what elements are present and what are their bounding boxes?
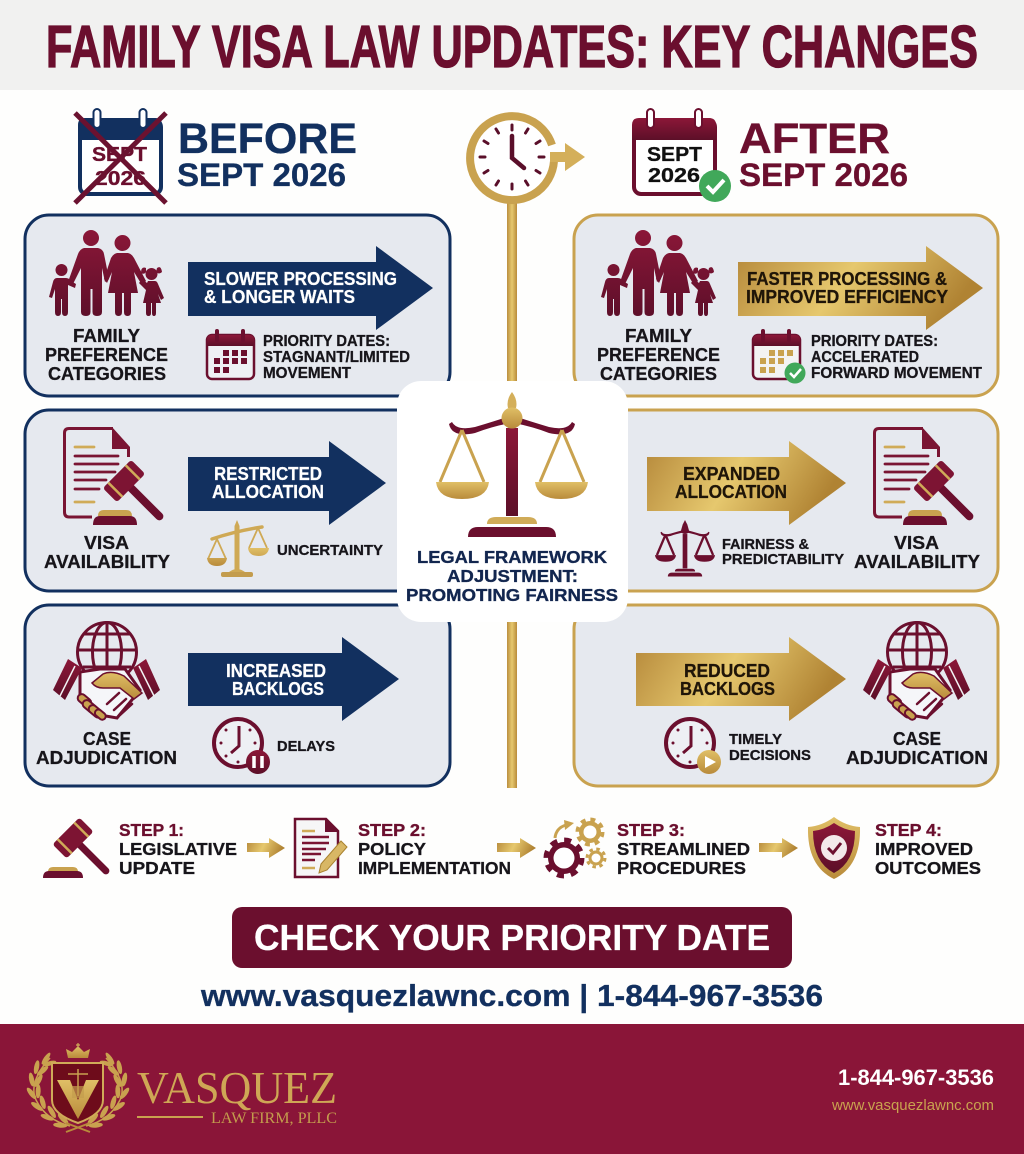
call to action button (232, 907, 792, 968)
text: legal framework caption: PROMOTING FAIRNESS (406, 585, 618, 605)
step 2: IMPLEMENTATION (358, 858, 511, 878)
arrow: slower processing: & LONGER WAITS (204, 287, 355, 307)
arrow: step 1 to 2 (247, 838, 285, 858)
panel: after, case adjudication (574, 605, 998, 786)
logo: crest (25, 1043, 131, 1133)
step 3 (546, 820, 750, 878)
arrow: faster processing: FASTER PROCESSING & (747, 269, 947, 289)
arrow: increased backlogs: INCREASED (226, 661, 326, 681)
label: family preference categories (597, 325, 720, 384)
icon: small tilted gold scales (207, 520, 269, 577)
footer contact: www.vasquezlawnc.com (831, 1097, 994, 1114)
arrow: increased backlogs (188, 637, 399, 721)
step 3: STEP 3: (617, 820, 685, 840)
text: priority dates (263, 333, 410, 382)
call to action button: CHECK YOUR PRIORITY DATE (254, 917, 770, 958)
logo: wordmark: VASQUEZ (137, 1062, 337, 1113)
panel: before, visa availability (25, 410, 450, 591)
step 2: STEP 2: (358, 820, 426, 840)
panel: before, case adjudication (25, 605, 450, 786)
center panel: legal framework adjustment (397, 381, 628, 622)
icon: calendar with check (753, 331, 806, 384)
icon: crossed-out calendar (75, 109, 166, 203)
icon: crossed-out calendar: 2026 (95, 167, 146, 190)
arrow: reduced backlogs (636, 637, 846, 721)
label: family preference categories: PREFERENCE (45, 344, 168, 365)
step 1: STEP 1: (119, 820, 184, 840)
arrow: slower processing (188, 246, 433, 330)
icon: checked calendar: SEPT (647, 143, 702, 166)
text: legal framework caption (406, 547, 618, 605)
label: family preference categories: FAMILY (73, 325, 141, 346)
icon: large scales of justice (436, 392, 588, 537)
step 3: STREAMLINED (617, 839, 750, 859)
arrow: expanded allocation (647, 441, 846, 525)
arrow: step 3 to 4 (759, 838, 798, 858)
before heading: BEFORE (178, 115, 357, 163)
text: fairness and predictability: FAIRNESS & (722, 536, 809, 553)
label: case adjudication (36, 728, 177, 768)
panel: after, visa availability (574, 410, 998, 591)
icon: document and gavel (64, 427, 176, 533)
icon: family (601, 230, 716, 316)
label: family preference categories: CATEGORIES (600, 363, 717, 384)
icon: gears (546, 820, 605, 876)
footer contact (831, 1065, 994, 1114)
text: uncertainty: UNCERTAINTY (277, 542, 383, 559)
label: visa availability (854, 532, 981, 572)
after heading: SEPT 2026 (739, 157, 908, 193)
text: priority dates: PRIORITY DATES: (263, 333, 390, 350)
footer contact: 1-844-967-3536 (838, 1065, 994, 1090)
icon: gavel (43, 817, 122, 887)
step 3: PROCEDURES (617, 858, 746, 878)
step 1: UPDATE (119, 858, 195, 878)
icon: clock with play (666, 719, 721, 774)
step 4: IMPROVED (875, 839, 973, 859)
icon: checked calendar: 2026 (648, 164, 700, 187)
step 4: OUTCOMES (875, 858, 981, 878)
label: family preference categories (45, 325, 168, 384)
text: timely decisions: TIMELY (729, 731, 782, 748)
panel: after, family preference categories (574, 215, 998, 396)
logo: wordmark: LAW FIRM, PLLC (211, 1110, 337, 1127)
label: case adjudication: CASE (893, 728, 941, 749)
arrow: slower processing: SLOWER PROCESSING (204, 269, 397, 289)
label: family preference categories: FAMILY (625, 325, 693, 346)
icon: globe and handshake (863, 622, 970, 721)
text: fairness and predictability: PREDICTABILITY (722, 551, 844, 568)
label: case adjudication: CASE (83, 728, 131, 749)
text: legal framework caption: ADJUSTMENT: (447, 566, 578, 586)
label: visa availability: VISA (894, 532, 939, 553)
contact line: www.vasquezlawnc.com | 1-844-967-3536 (200, 978, 823, 1013)
arrow: faster processing: IMPROVED EFFICIENCY (746, 287, 948, 307)
step 4 (808, 817, 981, 879)
icon: document with pen (295, 818, 347, 877)
arrow: increased backlogs: BACKLOGS (232, 679, 324, 699)
icon: small burgundy scales (655, 520, 715, 577)
arrow: step 2 to 3 (497, 838, 536, 858)
label: family preference categories: CATEGORIES (48, 363, 166, 384)
arrow: restricted allocation (188, 441, 386, 525)
icon: checked calendar (632, 109, 731, 202)
arrow: faster processing (738, 246, 983, 330)
before heading: SEPT 2026 (177, 157, 346, 193)
central gold timeline pole (507, 198, 517, 788)
label: case adjudication: ADJUDICATION (36, 747, 177, 768)
icon: document and gavel (874, 427, 986, 533)
step 4: STEP 4: (875, 820, 942, 840)
icon: crossed-out calendar: SEPT (92, 143, 147, 166)
icon: shield with check (808, 817, 860, 879)
arrow: restricted allocation: RESTRICTED (214, 464, 322, 484)
text: priority dates: PRIORITY DATES: (811, 333, 938, 350)
text: priority dates (811, 333, 983, 382)
text: priority dates: FORWARD MOVEMENT (811, 365, 983, 382)
text: fairness and predictability (722, 536, 844, 568)
text: delays: DELAYS (277, 738, 335, 755)
label: case adjudication: ADJUDICATION (846, 747, 988, 768)
step 2 (295, 818, 511, 878)
label: case adjudication (846, 728, 988, 768)
text: priority dates: MOVEMENT (263, 365, 352, 382)
label: family preference categories: PREFERENCE (597, 344, 720, 365)
label: visa availability (44, 532, 171, 572)
before heading (75, 109, 357, 203)
arrow: restricted allocation: ALLOCATION (212, 482, 324, 502)
step 1: LEGISLATIVE (119, 839, 237, 859)
step 2: POLICY (358, 839, 426, 859)
text: timely decisions: DECISIONS (729, 747, 811, 764)
step 1 (43, 817, 237, 887)
arrow: reduced backlogs: REDUCED (684, 661, 770, 681)
panel: before, family preference categories (25, 215, 450, 396)
icon: clock with pause (214, 719, 270, 774)
icon: family (49, 230, 164, 316)
label: visa availability: AVAILABILITY (44, 551, 171, 572)
label: visa availability: AVAILABILITY (854, 551, 981, 572)
arrow: expanded allocation: EXPANDED (683, 464, 780, 484)
icon: globe and handshake (53, 622, 160, 721)
arrow: expanded allocation: ALLOCATION (675, 482, 787, 502)
text: priority dates: ACCELERATED (811, 349, 919, 366)
text: legal framework caption: LEGAL FRAMEWORK (417, 547, 607, 567)
arrow: reduced backlogs: BACKLOGS (680, 679, 775, 699)
label: visa availability: VISA (84, 532, 129, 553)
text: timely decisions (729, 731, 811, 764)
after heading: AFTER (739, 115, 890, 163)
icon: clock with arrow (470, 116, 585, 200)
icon: calendar (207, 331, 254, 379)
footer (0, 1024, 1024, 1154)
after heading (632, 109, 908, 202)
text: priority dates: STAGNANT/LIMITED (263, 349, 410, 366)
